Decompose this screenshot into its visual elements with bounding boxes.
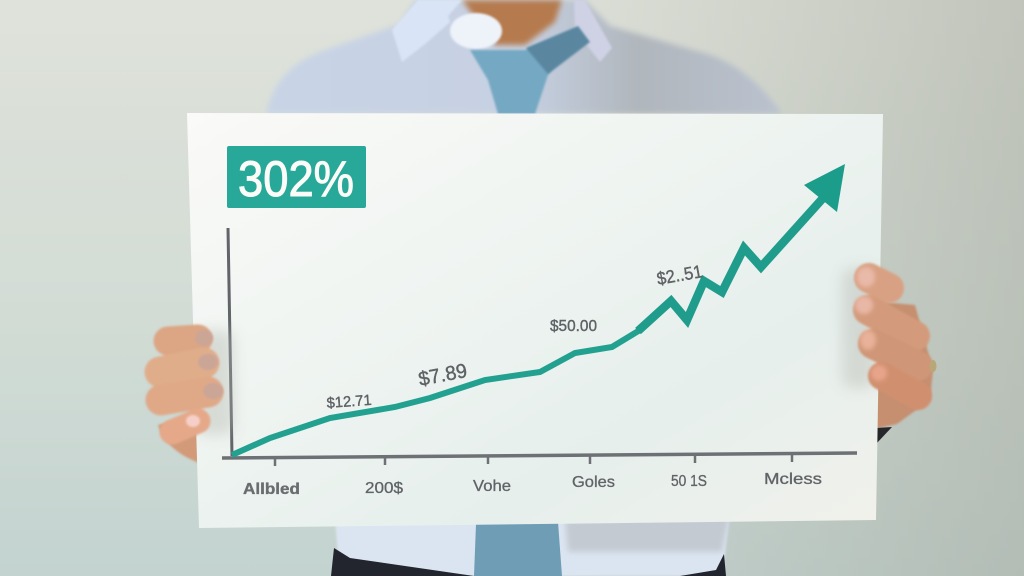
- label: Allbled: Allbled: [243, 481, 300, 498]
- label: Vohe: Vohe: [473, 478, 511, 495]
- neck: [462, 0, 562, 45]
- left ring finger: [161, 392, 208, 400]
- left hand fingers: [160, 330, 223, 432]
- collar button tab: [450, 13, 502, 49]
- value: $50.00: $50.00: [550, 318, 597, 335]
- left thumb: [172, 421, 198, 432]
- label: Goles: Goles: [572, 474, 615, 491]
- collar left: [392, 0, 462, 62]
- shirt upper body: [266, 0, 782, 114]
- arrowhead: [804, 164, 845, 212]
- right little finger: [882, 376, 918, 396]
- right fingertips: [855, 267, 887, 381]
- value: $7.89: $7.89: [417, 360, 469, 391]
- lower shirt: [335, 515, 730, 576]
- lower tie: [474, 522, 562, 576]
- trousers: [331, 548, 726, 576]
- ring: [930, 360, 936, 372]
- value: $2..51: $2..51: [655, 261, 704, 289]
- tie knot: [470, 30, 578, 114]
- collar right: [574, 0, 612, 62]
- label: 200$: 200$: [365, 480, 403, 497]
- value labels: [326, 261, 704, 412]
- y axis: [228, 228, 232, 456]
- left index finger: [168, 339, 198, 341]
- percent badge: 302%: [238, 151, 354, 207]
- lower shirt shade: [565, 515, 730, 552]
- cuff: [876, 427, 892, 444]
- left fingernails: [186, 330, 223, 427]
- label: Mcless: Mcless: [764, 471, 822, 488]
- right ring finger: [873, 344, 918, 366]
- left palm behind sheet: [158, 410, 215, 464]
- left middle finger: [160, 363, 204, 372]
- right index finger: [869, 278, 889, 288]
- value: $12.71: $12.71: [326, 392, 372, 412]
- growth line: [232, 164, 845, 455]
- label: 50 1S: 50 1S: [671, 473, 707, 490]
- x axis: [222, 453, 857, 466]
- person: shirt and tie: [266, 0, 782, 576]
- right middle finger: [868, 310, 915, 336]
- tie shade: [526, 26, 590, 74]
- x axis labels: [243, 471, 822, 498]
- soft shadows of fingers on sheet: [196, 268, 876, 435]
- right palm behind sheet: [860, 300, 933, 430]
- right hand fingers: [855, 267, 936, 396]
- paper sheet: [187, 113, 883, 528]
